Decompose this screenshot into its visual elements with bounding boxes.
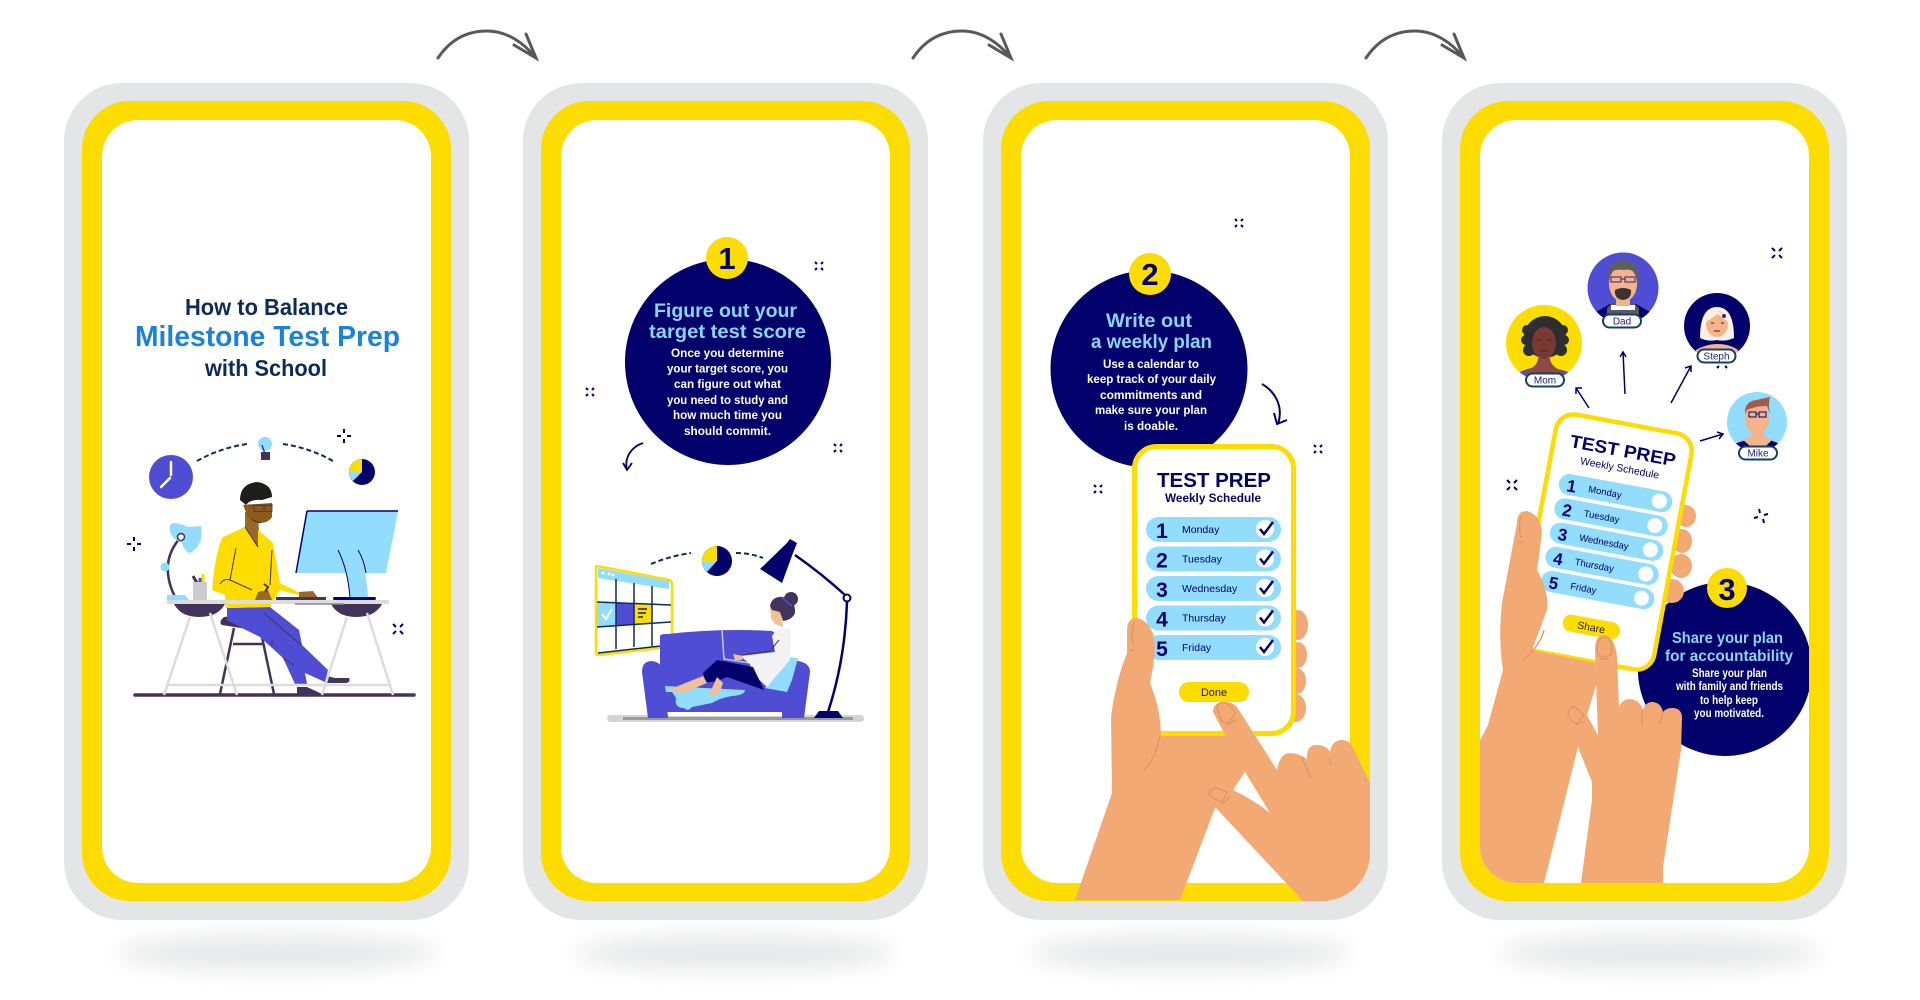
schedule title (1566, 431, 1677, 484)
gap between hands (1587, 686, 1598, 735)
schedule title: TEST PREP (1157, 470, 1271, 492)
name tag: Mom: Mom (1534, 376, 1556, 386)
sparkle (1314, 445, 1322, 453)
step 2 badge (1129, 253, 1171, 295)
step 2 body text: keep track of your daily (1087, 372, 1216, 386)
step 3 heading (1665, 630, 1793, 665)
step 2 heading: a weekly plan (1091, 331, 1212, 353)
arrows to family (1576, 352, 1723, 441)
schedule title: Weekly Schedule (1165, 491, 1261, 505)
step 1 heading: Figure out your (654, 300, 797, 322)
row: Monday (1557, 472, 1674, 514)
sparkle (1754, 509, 1768, 523)
illustration: person at desk (135, 482, 414, 695)
dashed arcs (197, 444, 333, 461)
step 3 body text: Share your plan (1692, 668, 1767, 680)
name tag: Steph: Steph (1703, 352, 1730, 362)
avatar: Steph (1684, 293, 1750, 362)
step 3 body text: you motivated. (1694, 708, 1764, 720)
person (212, 482, 350, 695)
schedule phone (1134, 446, 1294, 734)
step 1 body text: how much time you (673, 408, 782, 422)
step 3 badge (1707, 568, 1747, 608)
title text: Milestone Test Prep (135, 321, 400, 353)
sparkle (1235, 219, 1243, 227)
row: Wednesday: 3 (1556, 525, 1569, 545)
finger nails (1209, 703, 1236, 804)
row: Monday: Monday (1587, 484, 1623, 501)
stool (220, 616, 274, 694)
phone shadow 4 (1500, 936, 1820, 970)
panel: step 2 (983, 83, 1388, 920)
step 2 body text (1087, 357, 1216, 433)
right hand (1208, 702, 1370, 901)
icon: light bulb (258, 437, 272, 460)
step 1 body text: Once you determine (671, 346, 784, 360)
step 2 heading (1091, 310, 1212, 353)
step 3 heading: Share your plan (1672, 630, 1783, 647)
illustration: person on sofa (596, 539, 864, 722)
step 1 heading (649, 300, 806, 343)
step 1 body text: can figure out what (674, 377, 781, 391)
row: Thursday: Thursday (1182, 612, 1227, 624)
row: Thursday (1146, 606, 1281, 632)
step 1 circle (625, 259, 831, 465)
phone shadow 2 (575, 936, 895, 970)
step 1 heading: target test score (649, 321, 806, 343)
row: Tuesday: 2 (1561, 501, 1573, 521)
finger nails (1568, 637, 1612, 725)
step 1 body text: you need to study and (667, 393, 788, 407)
share button (1561, 613, 1621, 641)
row: Wednesday (1146, 576, 1281, 602)
desk (164, 597, 393, 695)
sparkle (586, 388, 594, 396)
sofa (642, 630, 810, 718)
calendar (596, 566, 672, 655)
panel: title screen (64, 83, 469, 920)
blanket and pillow (665, 657, 798, 710)
left hand (1470, 511, 1597, 883)
step 3 body text: with family and friends (1675, 681, 1783, 693)
step 3 badge: 3 (1718, 572, 1736, 607)
name tag: Dad: Dad (1613, 316, 1631, 328)
woman (668, 592, 798, 697)
dashed arcs (651, 553, 763, 564)
sparkle (127, 537, 141, 551)
title text (135, 294, 400, 381)
panel: step 1 (523, 83, 928, 920)
step 1 body text (667, 346, 788, 438)
fingers behind phone (1286, 610, 1308, 722)
icon: pie chart (349, 459, 375, 485)
row: Tuesday (1553, 497, 1670, 539)
finger details (1517, 516, 1663, 726)
step 3 heading: for accountability (1665, 648, 1793, 665)
row: Friday: 5 (1547, 573, 1560, 594)
step 3 body text: to help keep (1700, 695, 1758, 707)
desk lamp (160, 523, 202, 600)
step 2 heading: Write out (1106, 310, 1193, 332)
panel: step 3 (1442, 83, 1847, 920)
icon: pie chart (702, 546, 732, 576)
arrow: step 3 to step 4 (1366, 31, 1464, 58)
monitor (296, 511, 398, 600)
step 3 circle (1638, 582, 1809, 756)
finger details (1130, 622, 1330, 778)
avatar: Mike (1727, 392, 1787, 460)
floor (607, 715, 864, 722)
row: Friday: Friday (1569, 581, 1598, 597)
row: Wednesday: Wednesday (1578, 533, 1630, 553)
row: Friday (1146, 635, 1281, 661)
row: Friday: 5 (1156, 638, 1168, 661)
fingers behind phone (1660, 505, 1696, 603)
arrow: down-left (623, 443, 643, 470)
sparkle (337, 429, 351, 443)
sparkle (815, 262, 823, 270)
phone shadow 1 (117, 936, 437, 970)
sparkle (1717, 366, 1727, 368)
title text: with School (204, 355, 327, 381)
step 3 body text (1675, 668, 1783, 720)
phone shadow 3 (1030, 936, 1350, 970)
row: Thursday: 4 (1552, 549, 1565, 570)
floor (135, 693, 414, 697)
sparkle (393, 624, 403, 634)
step 1 body text: your target score, you (667, 362, 788, 376)
row: Tuesday: 2 (1156, 550, 1168, 572)
row: Tuesday: Tuesday (1182, 554, 1223, 566)
schedule title (1157, 470, 1271, 505)
step 2 circle (1050, 270, 1248, 468)
row: Wednesday: 3 (1156, 579, 1168, 602)
icon: clock (149, 455, 193, 499)
floor lamp (760, 539, 850, 718)
schedule title: Weekly Schedule (1579, 455, 1660, 482)
step 1 body text: should commit. (684, 424, 771, 438)
arrow: step 1 to step 2 (438, 31, 536, 58)
avatar: Mom (1506, 305, 1582, 390)
avatar: Dad (1588, 252, 1658, 328)
row: Wednesday (1548, 521, 1665, 563)
row: Wednesday: Wednesday (1182, 583, 1238, 595)
row: Tuesday: Tuesday (1583, 508, 1621, 526)
arrow: step 2 to step 3 (913, 31, 1011, 58)
sparkle (1772, 248, 1782, 258)
row: Friday (1539, 569, 1656, 611)
sparkle (1094, 485, 1102, 493)
step 2 body text: commitments and (1100, 388, 1202, 402)
right hand (1567, 635, 1682, 883)
row: Thursday (1544, 545, 1661, 587)
row: Thursday: 4 (1156, 608, 1168, 632)
tilted schedule phone (1515, 411, 1695, 673)
schedule title: TEST PREP (1569, 431, 1677, 470)
row: Friday: Friday (1182, 642, 1212, 654)
step 1 badge (706, 237, 748, 279)
left hand (1075, 618, 1245, 900)
hands holding phone (1075, 618, 1370, 901)
hands holding phone (1470, 511, 1682, 883)
step 2 body text: is doable. (1124, 419, 1178, 433)
pen cup (193, 574, 207, 600)
done button: Done (1201, 687, 1227, 699)
row: Monday: 1 (1565, 476, 1578, 497)
arrow: down-right (1262, 384, 1287, 424)
title text: How to Balance (185, 294, 348, 320)
row: Monday: Monday (1182, 524, 1220, 536)
row: Tuesday (1146, 546, 1281, 572)
step 2 badge: 2 (1141, 257, 1159, 292)
step 2 body text: Use a calendar to (1103, 357, 1199, 371)
share button: Share (1576, 619, 1606, 636)
sparkle (1507, 480, 1517, 490)
step 1 badge: 1 (718, 241, 736, 276)
row: Monday (1146, 517, 1281, 543)
done button (1179, 682, 1249, 702)
step 2 body text: make sure your plan (1095, 403, 1207, 417)
row: Monday: 1 (1156, 520, 1168, 543)
sparkle (834, 444, 842, 452)
name tag: Mike: Mike (1747, 448, 1769, 460)
row: Thursday: Thursday (1574, 557, 1615, 575)
